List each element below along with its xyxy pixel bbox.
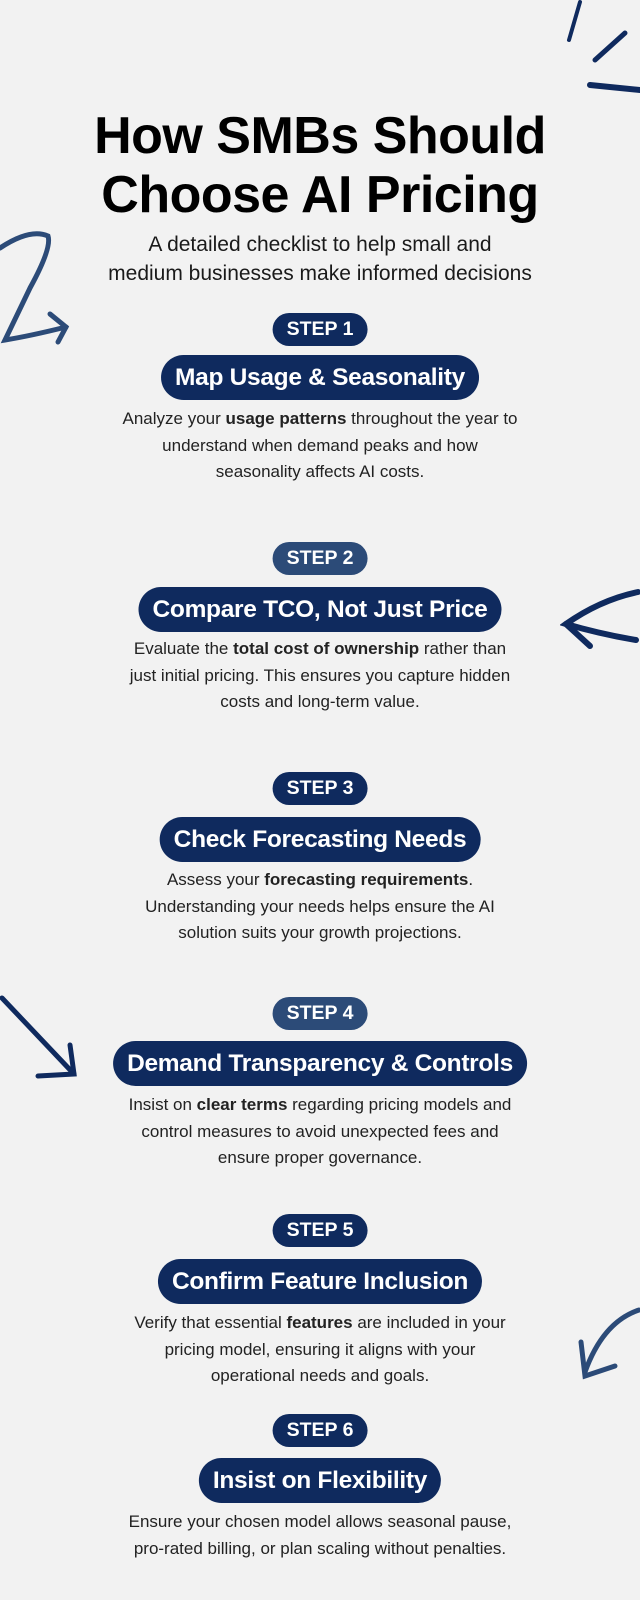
text: Understanding your needs helps ensure the AI	[145, 896, 495, 916]
subtitle: medium businesses make informed decisions	[108, 262, 532, 284]
text: Compare TCO, Not Just Price	[153, 596, 487, 623]
text: Verify that essential features are included in your	[134, 1313, 506, 1332]
text: pricing model, ensuring it aligns with your	[165, 1340, 475, 1358]
text: just initial pricing. This ensures you capture hidden	[130, 666, 510, 684]
arrow: right curved down-left	[578, 1308, 640, 1380]
step 6	[273, 1414, 367, 1447]
text: Analyze your usage patterns throughout the year to	[122, 409, 518, 428]
decoration: top-right strokes	[566, 0, 640, 93]
step 2	[273, 542, 367, 575]
text: Map Usage & Seasonality	[175, 364, 465, 391]
text: Insist on Flexibility	[213, 1467, 427, 1494]
step 3: STEP 3	[287, 777, 353, 799]
text: seasonality affects AI costs.	[216, 462, 424, 481]
text: solution suits your growth projections.	[178, 923, 462, 942]
subtitle: A detailed checklist to help small and	[148, 233, 492, 256]
step 1: STEP 1	[287, 318, 353, 340]
text: Confirm Feature Inclusion	[172, 1268, 468, 1295]
step 4	[273, 997, 367, 1030]
step 2: STEP 2	[287, 547, 353, 569]
text: operational needs and goals.	[211, 1366, 429, 1385]
arrow: left diagonal	[0, 996, 77, 1078]
arrow: left zigzag	[0, 231, 70, 344]
text: costs and long-term value.	[220, 692, 420, 711]
step 6: STEP 6	[287, 1419, 353, 1441]
text: ensure proper governance.	[218, 1148, 422, 1167]
text: Demand Transparency & Controls	[127, 1050, 513, 1077]
text: Evaluate the total cost of ownership rather than	[134, 639, 506, 658]
step 1	[273, 313, 367, 346]
arrow: right pointing left	[560, 589, 640, 649]
text: Insist on clear terms regarding pricing models and	[129, 1095, 511, 1114]
subtitle	[108, 233, 532, 284]
text: Check Forecasting Needs	[174, 826, 466, 853]
title: How SMBs Should	[94, 107, 546, 165]
step 4: STEP 4	[287, 1002, 353, 1024]
text: pro-rated billing, or plan scaling without penalties.	[134, 1538, 506, 1558]
step 5: STEP 5	[287, 1219, 353, 1241]
step 3	[273, 772, 367, 805]
title: Choose AI Pricing	[101, 166, 539, 224]
step 5	[273, 1214, 367, 1247]
text: understand when demand peaks and how	[162, 436, 478, 454]
title	[94, 107, 546, 224]
text: control measures to avoid unexpected fees and	[141, 1122, 499, 1140]
text: Assess your forecasting requirements.	[167, 870, 473, 889]
text: Ensure your chosen model allows seasonal pause,	[129, 1512, 511, 1531]
